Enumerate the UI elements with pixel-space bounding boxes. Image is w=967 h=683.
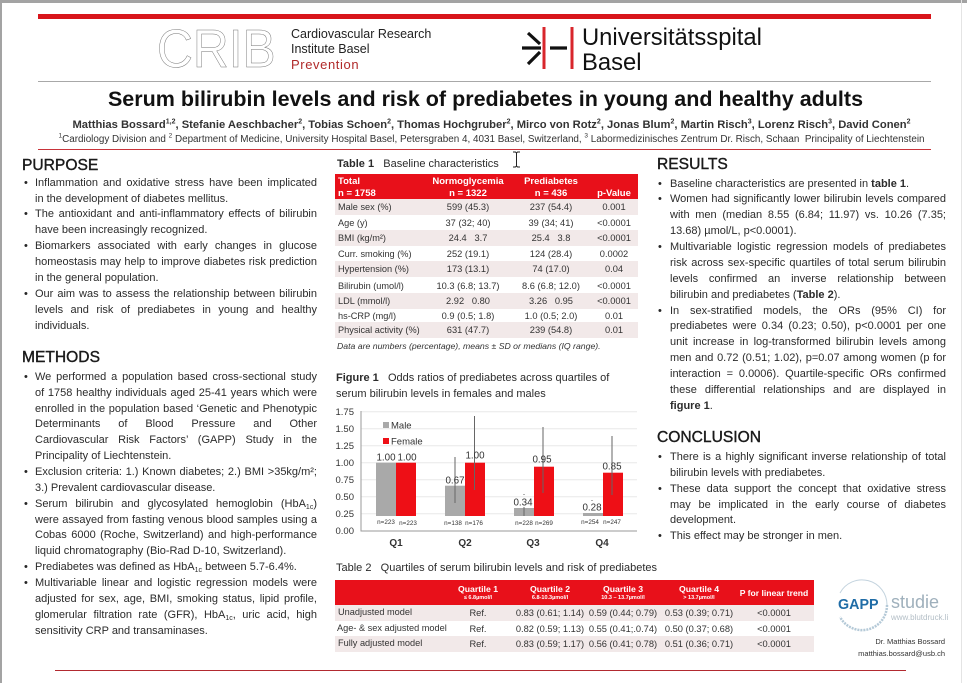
panel: methods: [22, 349, 317, 637]
table 2 rows: 0.51 (0.36; 0.71): [665, 639, 733, 649]
table 1 header: Total: [338, 176, 360, 187]
sample size labels: n=269: [535, 520, 553, 527]
institute name: [291, 27, 431, 72]
results bullet list: men and 0.72 (0.51; 1.02), p=0.07 among women (p for: [670, 352, 946, 364]
logo mark: [522, 27, 574, 69]
bar chart: [336, 407, 637, 549]
table 1 rows: 2.92 0.80: [446, 296, 490, 306]
y axis labels: 0.75: [336, 475, 354, 486]
purpose bullet list: The antioxidant and anti-inflammatory effects of bilirubin: [35, 208, 317, 220]
conclusion bullet list: This effect may be stronger in men.: [670, 530, 842, 542]
table 1 rows: 124 (28.4): [530, 249, 572, 259]
logo: GAPP studie: [838, 579, 948, 632]
table 2 header: Quartile 4: [679, 584, 719, 594]
table 1 rows: hs-CRP (mg/l): [338, 311, 396, 321]
methods bullet list: •: [24, 371, 28, 383]
methods bullet list: [24, 371, 317, 637]
purpose bullet list: •: [24, 177, 28, 189]
results bullet list: 13.68) µmol/L, p<0.0001).: [670, 225, 796, 237]
purpose bullet list: have been increasingly recognized.: [35, 224, 207, 236]
table 2 rows: 0.59 (0.44; 0.79): [589, 608, 657, 618]
value labels: 0.67: [445, 476, 465, 486]
error bars: [455, 416, 612, 516]
legend: [383, 420, 423, 448]
table 2 rows: 0.83 (0.61; 1.14): [516, 608, 584, 618]
quartile labels: Q1: [389, 538, 403, 549]
heading: methods: METHODS: [22, 349, 100, 366]
results bullet list: Women had significantly lower bilirubin levels compared: [670, 193, 946, 205]
y axis labels: 0.00: [336, 526, 354, 537]
y axis labels: [336, 407, 354, 537]
panel: table 2 quartiles: [335, 562, 814, 652]
legend: Male: [391, 420, 412, 432]
affiliations: 1Cardiology Division and 2 Department of Medicine, University Hospital Basel, Petersgraben 4, 4031 Basel, Switzerland, 3 Labormedizinisches Zentrum Dr. Risch, Schaan Principality of Liechtenstein: [58, 133, 925, 145]
purpose bullet list: •: [24, 288, 28, 300]
table 1 header: [335, 174, 638, 199]
table 2 rows: 0.53 (0.39; 0.71): [665, 608, 733, 618]
table 2 rows: Unadjusted model: [338, 607, 412, 617]
table 1 rows: 0.01: [605, 325, 623, 335]
methods bullet list: •: [24, 561, 28, 573]
table 2 rows: Age- & sex adjusted model: [337, 623, 447, 633]
purpose bullet list: Inflammation and oxidative stress have been implicated: [35, 177, 317, 189]
table 1 header: Normoglycemia: [432, 176, 504, 187]
contact details: matthias.bossard@usb.ch: [858, 648, 945, 658]
table 1 rows: Hypertension (%): [338, 264, 409, 274]
table 1 rows: Age (y): [338, 218, 368, 228]
sample size labels: n=223: [399, 520, 417, 527]
table 2 header: [335, 580, 814, 605]
table 1 rows: 599 (45.3): [447, 202, 489, 212]
results bullet list: risk across sex-specific quartiles of total serum bilirubin: [670, 257, 946, 269]
table 1 rows: 24.4 3.7: [449, 233, 487, 243]
results bullet list: •: [658, 178, 662, 190]
purpose bullet list: Biomarkers associated with early changes in glucose: [35, 240, 317, 252]
sample size labels: n=223: [377, 519, 395, 526]
table 1 title: Table 1 Baseline characteristics: [337, 158, 499, 170]
table 1 rows: 252 (19.1): [447, 249, 489, 259]
methods bullet list: sensitivity CRP and transaminases.: [35, 625, 208, 637]
table 2 rows: 0.56 (0.41; 0.78): [589, 639, 657, 649]
purpose bullet list: homeostasis may help to improve diabetes risk prediction: [35, 256, 317, 268]
y axis labels: 1.75: [336, 407, 354, 418]
purpose bullet list: in the general population.: [35, 272, 159, 284]
methods bullet list: Principality of Liechtenstein.: [35, 450, 171, 462]
y axis labels: 1.25: [336, 441, 354, 452]
methods bullet list: We performed a population based cross-sectional study: [35, 371, 317, 383]
logo: CRIB Cardiovascular Research Institute Basel: [159, 27, 431, 72]
methods bullet list: Cobas 6000 (Roche, Switzerland) and high-performance: [35, 529, 317, 541]
methods bullet list: of 1758 healthy individuals aged 25-41 years which were: [35, 387, 317, 399]
table 1 rows: [335, 199, 638, 338]
methods bullet list: adjusted for sex, age, BMI, smoking status, lipid profile,: [35, 593, 317, 605]
results bullet list: prediabetes were 0.34 (0.23; 0.50), p<0.0001 per one: [670, 320, 946, 332]
sample size labels: [377, 519, 621, 527]
methods bullet list: Cardiovascular Risk Factors’ (GAPP) Study in the: [35, 434, 317, 446]
results bullet list: figure 1.: [670, 400, 713, 412]
purpose bullet list: levels and risk of prediabetes in young and healthy: [35, 304, 317, 316]
methods bullet list: were assayed from fasting venous blood samples using a: [35, 514, 317, 526]
table 1 rows: <0.0001: [597, 218, 631, 228]
purpose bullet list: [24, 177, 317, 332]
methods bullet list: •: [24, 577, 28, 589]
sample size labels: n=247: [603, 519, 621, 526]
results bullet list: interaction = 0.0006). Quartile-specific ORs confirmed: [670, 368, 946, 380]
conclusion bullet list: •: [658, 530, 662, 542]
quartile labels: Q2: [458, 538, 472, 549]
table 1 rows: Curr. smoking (%): [338, 249, 412, 259]
legend: Female: [391, 436, 423, 448]
purpose bullet list: Our aim was to assess the relationship between bilirubin: [35, 288, 317, 300]
methods bullet list: Prediabetes was defined as HbA1c between 5.7-6.4%.: [35, 561, 297, 574]
table 1 rows: 237 (54.4): [530, 202, 572, 212]
table 2 rows: Ref.: [469, 608, 487, 618]
icon: text cursor: [513, 152, 520, 168]
hospital name: Universitätsspital: [582, 24, 762, 51]
table 2 rows: Ref.: [469, 624, 487, 634]
table 1 rows: 8.6 (6.8; 12.0): [522, 281, 580, 291]
table 1 rows: 39 (34; 41): [529, 218, 573, 228]
sample size labels: n=176: [465, 520, 483, 527]
methods bullet list: Multivariable linear and logistic regression models were: [35, 577, 317, 589]
table 2 rows: <0.0001: [757, 639, 791, 649]
table 1 rows: 10.3 (6.8; 13.7): [436, 281, 500, 291]
table 1 header: n = 436: [535, 188, 567, 199]
results bullet list: •: [658, 305, 662, 317]
table 2 rows: 0.83 (0.59; 1.17): [516, 639, 584, 649]
y axis labels: 0.25: [336, 509, 354, 520]
institute name: Cardiovascular Research: [291, 27, 431, 41]
methods bullet list: 3.) Prevalent cardiovascular disease.: [35, 482, 215, 494]
conclusion bullet list: •: [658, 483, 662, 495]
table 1 rows: 0.0002: [600, 249, 628, 259]
contact details: [858, 637, 945, 658]
logo: Universitätsspital Basel: [522, 24, 762, 76]
conclusion bullet list: may be implicated in the early course of diabetes: [670, 499, 946, 511]
table 1 rows: 74 (17.0): [532, 264, 570, 274]
figure 1 title: Figure 1 Odds ratios of prediabetes across quartiles of: [336, 372, 609, 384]
hospital name: [582, 24, 762, 76]
results bullet list: Multivariable logistic regression models of prediabetes: [670, 241, 946, 253]
table 2 header: Quartile 1: [458, 584, 498, 594]
table 1 rows: 631 (47.7): [447, 325, 489, 335]
institute name: Institute Basel: [291, 42, 370, 56]
sample size labels: n=138: [444, 520, 462, 527]
conclusion bullet list: •: [658, 451, 662, 463]
conclusion bullet list: These data support the concept that oxidative stress: [670, 483, 946, 495]
results bullet list: [658, 178, 946, 412]
sample size labels: n=228: [515, 520, 533, 527]
table 1 rows: 37 (32; 40): [446, 218, 490, 228]
table 2 rows: 0.82 (0.59; 1.13): [516, 624, 584, 634]
conclusion bullet list: There is a highly significant inverse relationship of total: [670, 451, 946, 463]
table 1 rows: Physical activity (%): [338, 325, 420, 335]
table 1 rows: 239 (54.8): [530, 325, 572, 335]
table 2 header: ≤ 6.8µmol/l: [464, 595, 492, 601]
value labels: 1.00: [376, 452, 396, 464]
table 1 rows: 1.0 (0.5; 2.0): [525, 311, 577, 321]
table 2 rows: <0.0001: [757, 624, 791, 634]
conclusion bullet list: bilirubin levels with prediabetes.: [670, 467, 825, 479]
table 1 rows: 0.04: [605, 264, 623, 274]
table 2 header: Quartile 3: [603, 584, 643, 594]
table 1 footnote: Data are numbers (percentage), means ± SD or medians (IQ range).: [337, 341, 601, 351]
table 1 header: n = 1322: [449, 188, 487, 199]
table 1 rows: Bilirubin (umol/l): [338, 281, 404, 291]
panel: results: [657, 156, 946, 412]
results bullet list: with men (median 8.55 (6.84; 11.97) vs. 10.26 (7.35;: [670, 209, 946, 221]
value labels: [376, 450, 622, 514]
sample size labels: n=254: [581, 519, 599, 526]
methods bullet list: Exclusion criteria: 1.) Known diabetes; 2.) BMI >35kg/m²;: [35, 466, 317, 478]
table 1 rows: 0.001: [602, 202, 626, 212]
y axis labels: 1.50: [336, 424, 354, 435]
table 1 header: n = 1758: [338, 188, 376, 199]
methods bullet list: liquid chromatography (Bio-Rad D-10, Switzerland).: [35, 545, 286, 557]
male bars: [376, 463, 603, 516]
methods bullet list: glomerular filtration rate (GFR), HbA1c, uric acid, high: [35, 609, 317, 622]
circular arc: [839, 579, 888, 632]
table 2 rows: [335, 605, 814, 652]
purpose bullet list: •: [24, 208, 28, 220]
title: Serum bilirubin levels and risk of prediabetes in young and healthy adults: [108, 87, 863, 111]
table 1 rows: <0.0001: [597, 281, 631, 291]
table 1 rows: BMI (kg/m²): [338, 233, 386, 243]
table 2 header: P for linear trend: [740, 588, 808, 598]
panel: conclusion: [657, 429, 946, 542]
table 1 rows: 0.9 (0.5; 1.8): [442, 311, 494, 321]
GAPP wordmark: GAPP: [838, 597, 879, 613]
value labels: 0.95: [532, 454, 552, 466]
authors: Matthias Bossard1,2, Stefanie Aeschbacher2, Tobias Schoen2, Thomas Hochgruber2, Mirco von Rotz2, Jonas Blum2, Martin Risch3, Lorenz Risch3, David Conen2: [72, 118, 910, 131]
table 1 rows: <0.0001: [597, 296, 631, 306]
figure 1 title: [336, 372, 610, 400]
value labels: 0.28: [582, 502, 602, 514]
methods bullet list: enrolled in the population based ‘Genetic and Phenotypic: [35, 403, 317, 415]
purpose bullet list: •: [24, 240, 28, 252]
female bars: [396, 463, 623, 516]
table 2 rows: <0.0001: [757, 608, 791, 618]
quartile labels: Q4: [595, 538, 609, 549]
institute name: Prevention: [291, 57, 359, 72]
figure 1 title: serum bilirubin levels in females and males: [336, 388, 546, 400]
table 1 rows: Male sex (%): [338, 202, 392, 212]
heading: results: RESULTS: [657, 156, 728, 173]
table 1 rows: LDL (mmol/l): [338, 296, 390, 306]
table 2 title: Table 2 Quartiles of serum bilirubin levels and risk of prediabetes: [336, 562, 657, 574]
table 1 rows: 173 (13.1): [447, 264, 489, 274]
table 1 header: p-Value: [597, 188, 631, 199]
table 2 rows: 0.50 (0.37; 0.68): [665, 624, 733, 634]
table 2 header: 6.8-10.3µmol/l: [532, 595, 568, 601]
results bullet list: unit increase in log-transformed bilirubin levels among: [670, 336, 946, 348]
table 2 rows: Ref.: [469, 639, 487, 649]
table 1 rows: 0.01: [605, 311, 623, 321]
value labels: 0.85: [602, 462, 622, 472]
website: www.blutdruck.li: [891, 613, 948, 622]
table 1 rows: 25.4 3.8: [532, 233, 570, 243]
methods bullet list: •: [24, 498, 28, 510]
value labels: 1.00: [465, 450, 485, 462]
conclusion bullet list: [658, 451, 946, 542]
panel: figure 1 odds ratios: [336, 372, 637, 549]
purpose bullet list: in the development of diabetes mellitus.: [35, 193, 228, 205]
table 2 header: Quartile 2: [530, 584, 570, 594]
table 2 header: > 13.7µmol/l: [683, 595, 715, 601]
contact details: Dr. Matthias Bossard: [875, 637, 945, 646]
methods bullet list: •: [24, 466, 28, 478]
results bullet list: Baseline characteristics are presented in table 1.: [670, 178, 909, 190]
methods bullet list: Serum bilirubin and glycosylated hemoglobin (HbA1c): [35, 498, 317, 511]
results bullet list: bilirubin and prediabetes (Table 2).: [670, 289, 840, 301]
y axis labels: 0.50: [336, 492, 354, 503]
table 1 rows: <0.0001: [597, 233, 631, 243]
quartile labels: Q3: [526, 538, 540, 549]
panel: table 1 baseline characteristics: [335, 158, 638, 351]
table 2 header: 10.3 – 13.7µmol/l: [601, 595, 645, 601]
results bullet list: •: [658, 241, 662, 253]
value labels: 0.34: [513, 498, 533, 508]
results bullet list: •: [658, 193, 662, 205]
methods bullet list: Determinants of Blood Pressure and Other: [35, 418, 317, 430]
results bullet list: levels confirmed an inverse relationship between: [670, 273, 946, 285]
results bullet list: these differential relationships and are displayed in: [670, 384, 946, 396]
table 2 rows: Fully adjusted model: [338, 638, 422, 648]
y axis labels: 1.00: [336, 458, 354, 469]
table 2 rows: 0.55 (0.41;.0.74): [589, 624, 657, 634]
value labels: 1.00: [397, 452, 417, 464]
heading: purpose: PURPOSE: [22, 157, 98, 174]
hospital name: Basel: [582, 49, 642, 76]
studie wordmark: studie: [891, 592, 939, 612]
table 1 header: Prediabetes: [524, 176, 578, 187]
quartile labels: [389, 538, 609, 549]
conclusion bullet list: development.: [670, 514, 736, 526]
heading: conclusion: CONCLUSION: [657, 429, 761, 446]
results bullet list: In sex-stratified models, the ORs (95% CI) for: [670, 305, 946, 317]
purpose bullet list: individuals.: [35, 320, 89, 332]
table 1 rows: 3.26 0.95: [529, 296, 573, 306]
panel: purpose: [22, 157, 317, 332]
